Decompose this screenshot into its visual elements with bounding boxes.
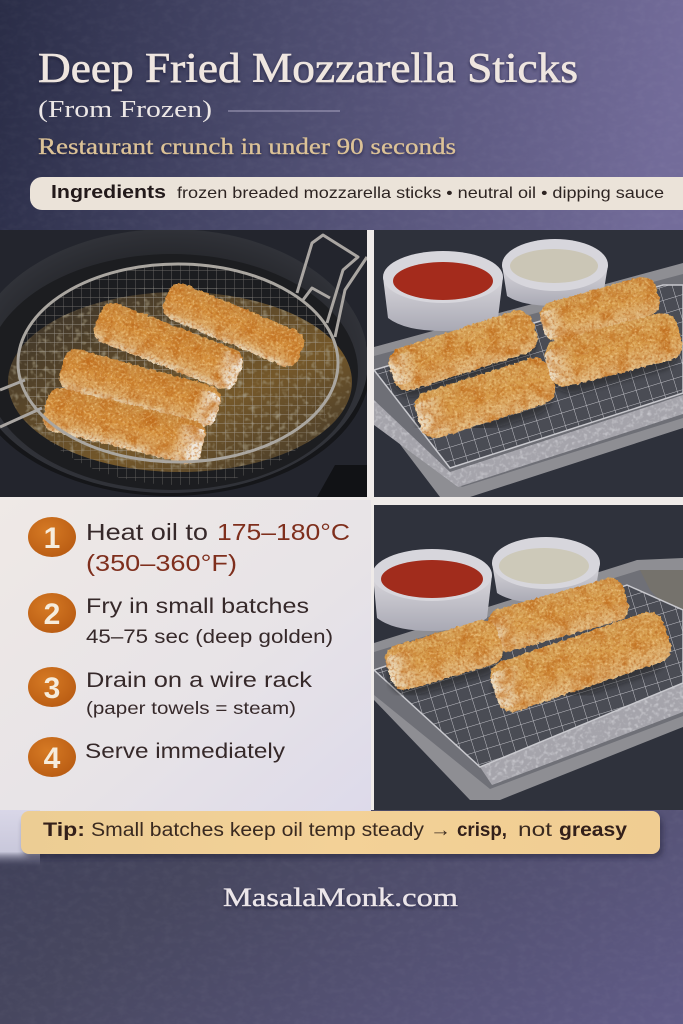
- step 4 badge: [28, 737, 76, 777]
- step 3 text: [86, 668, 312, 718]
- paper and crumbs: [374, 395, 683, 487]
- wire rack: [374, 285, 683, 468]
- step 2 badge: [28, 593, 76, 633]
- step 3 text: Drain on a wire rack: [86, 668, 312, 692]
- paper and crumbs: [480, 683, 683, 785]
- step 4 text: Serve immediately: [85, 739, 285, 763]
- subtitle: from frozen: (From Frozen): [38, 97, 212, 123]
- stick 3: [56, 346, 224, 430]
- step 3 badge: 3: [44, 672, 60, 705]
- tip bar: [21, 811, 663, 858]
- stick B: [414, 357, 556, 438]
- stick shadow: [410, 649, 642, 691]
- ingredients label: Ingredients: [51, 181, 166, 202]
- photo: three sticks on wire rack: [372, 505, 683, 810]
- upper basket mesh: [18, 264, 338, 462]
- photo: sticks frying in basket: [0, 229, 370, 497]
- tip text: crisp,: [457, 820, 507, 841]
- stick 2: [485, 575, 632, 655]
- white sauce bowl: [492, 537, 600, 603]
- stick 1: [162, 282, 305, 368]
- tip text: [43, 820, 627, 841]
- step 2 text: Fry in small batches: [86, 594, 309, 618]
- tray: [374, 263, 683, 497]
- red sauce bowl: [383, 251, 503, 331]
- panel: steps: [0, 500, 371, 868]
- title: Deep Fried Mozzarella Sticks: [38, 46, 578, 92]
- step 1 badge: 1: [44, 522, 60, 555]
- website credit: MasalaMonk.com: [223, 883, 458, 912]
- stick 2: [93, 302, 244, 390]
- stick D: [542, 310, 683, 390]
- step 1 text: (350–360°F): [86, 550, 237, 576]
- red sauce bowl: [372, 549, 492, 631]
- step 2 text: 45–75 sec (deep golden): [86, 626, 333, 648]
- step 4 badge: 4: [44, 742, 61, 775]
- ingredients list: frozen breaded mozzarella sticks • neutral oil • dipping sauce: [177, 185, 664, 202]
- ingredients bar: [30, 177, 683, 210]
- step 1 text: 175–180°C: [217, 519, 350, 545]
- basket rim: [18, 264, 338, 462]
- hot oil: [8, 292, 352, 472]
- step 3 badge: [28, 667, 76, 707]
- step 1 text: Heat oil to: [86, 519, 208, 545]
- step 1 badge: [28, 517, 76, 557]
- basket handles: [0, 235, 367, 427]
- stick 3: [486, 608, 675, 716]
- white sauce bowl: [502, 239, 608, 306]
- white frame behind photos: [0, 230, 683, 810]
- stick C: [539, 276, 660, 342]
- step 1 text: [86, 519, 350, 576]
- photo: four sticks on wire rack: [374, 230, 683, 497]
- pan: [0, 229, 370, 497]
- tray: [374, 558, 683, 800]
- tagline: Restaurant crunch in under 90 seconds: [38, 134, 456, 159]
- stick shadow: [412, 342, 656, 420]
- tip text: greasy: [559, 820, 627, 841]
- tip text: Small batches keep oil temp steady →: [91, 820, 451, 841]
- step 3 text: (paper towels = steam): [86, 698, 296, 718]
- stick 4: [40, 386, 208, 466]
- step 2 text: [86, 594, 333, 648]
- tip text: Tip:: [43, 820, 85, 841]
- stick A: [388, 310, 538, 392]
- tip text: not: [518, 820, 553, 841]
- wire rack: [374, 585, 683, 767]
- lower basket mesh: [23, 285, 333, 485]
- stick 1: [384, 620, 503, 690]
- step 2 badge: 2: [44, 598, 60, 631]
